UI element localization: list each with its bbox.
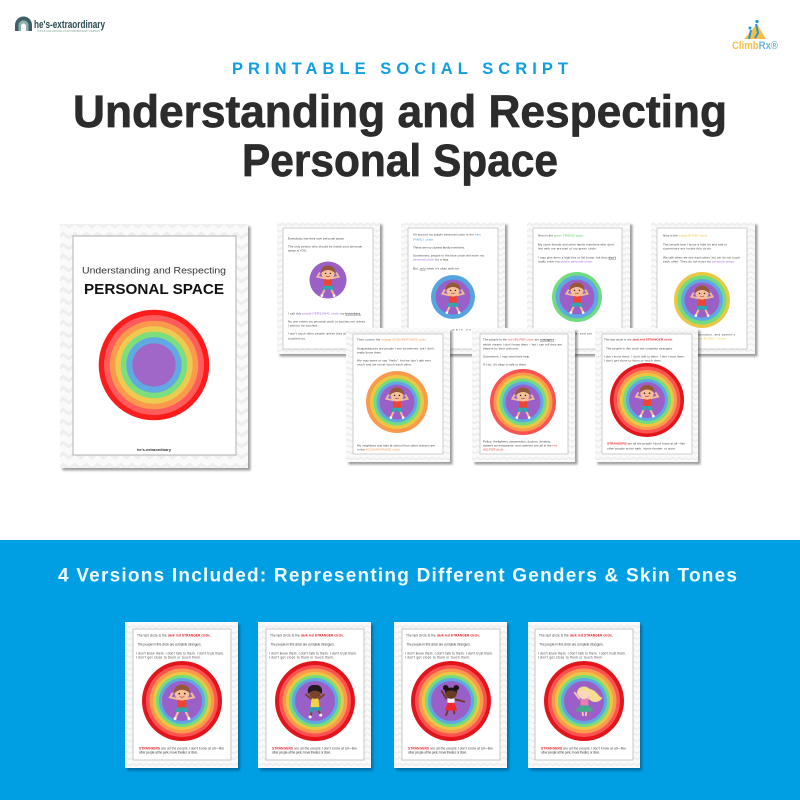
panel: page 2 blue family circle: personal circle for a hug. xyxy=(413,257,449,261)
panel: page 6 red helper circle: waiters at restaurants, and cashiers are all in the red xyxy=(483,443,557,447)
panel: version 4 blonde girl: STRANGERS are all the people I don't know at all—like xyxy=(541,746,626,750)
panel: page 4 yellow buddy circle: friends are in the yellow BUDDY circle. xyxy=(663,336,727,340)
panel: page 4 yellow buddy circle: sometimes are inside this circle. xyxy=(663,246,712,250)
panel: version 1 boy: The people in this circle are complete strangers. xyxy=(138,642,202,646)
panel: page 1 purple personal circle: I want to be touched. xyxy=(288,323,318,327)
panel: version 1 boy xyxy=(125,622,238,768)
panel: version 3 dark-skinned girl: other people at the park, movie theater, or store. xyxy=(408,750,467,754)
panel: page 6 red helper circle: which means I don't know them – but I can tell they are xyxy=(483,342,562,346)
panel: page 6 red helper circle: helpers by their uniforms. xyxy=(483,346,519,350)
panel: page 6 red helper circle: If I do, it's okay to talk to them. xyxy=(483,362,527,366)
panel: page 1 purple personal circle: I don't touch other people unless they also want to be xyxy=(288,331,365,335)
logo: ClimbRx xyxy=(732,20,778,52)
panel: page 2 blue family circle: These are my closest family members. xyxy=(413,245,465,249)
panel: page 2 blue family circle: , hugs, and pats on xyxy=(420,327,471,331)
panel: page 2 blue family circle xyxy=(401,222,505,354)
panel: page 5 orange acquaintance circle: really know them. xyxy=(357,350,382,354)
title xyxy=(73,86,727,186)
panel: page 3 green friend circle: My close friends and other family members who don't xyxy=(538,242,614,246)
panel: page 2 blue family circle: But, only when it's okay with me. xyxy=(413,266,460,270)
panel: version 4 blonde girl: I don't get close to them or touch them. xyxy=(538,655,603,659)
panel: version 3 dark-skinned girl: STRANGERS are all the people I don't know at all—like xyxy=(408,746,493,750)
panel: page 5 orange acquaintance circle: We may wave or say "Hello", but we don't talk very xyxy=(357,358,431,362)
panel: version 3 dark-skinned girl xyxy=(394,622,507,768)
panel: page 4 yellow buddy circle xyxy=(651,222,755,354)
panel: version 2 dark-skinned boy: I don't get close to them or touch them. xyxy=(269,655,334,659)
rainbow circle xyxy=(99,310,209,420)
panel: page 1 purple personal circle: space is YOU. xyxy=(288,248,307,252)
panel: page 1 purple personal circle xyxy=(277,222,380,354)
panel: version 2 dark-skinned boy: STRANGERS are all the people I don't know at all—like xyxy=(272,746,357,750)
panel: page 6 red helper circle xyxy=(472,328,575,462)
panel: page 5 orange acquaintance circle xyxy=(346,328,450,462)
panel: page 4 yellow buddy circle: Next is the yellow BUDDY circle. xyxy=(663,233,708,237)
panel: page 6 red helper circle: Sometimes, I may need their help. xyxy=(483,354,530,358)
panel: page 5 orange acquaintance circle: Then comes the orange ACQUAINTANCE circle. xyxy=(357,337,427,341)
panel: page 6 red helper circle: HELPER circle. xyxy=(483,447,504,451)
panel: cover page: PERSONAL SPACE xyxy=(84,281,224,298)
panel: page 6 red helper circle: Police, firefighters, paramedics, doctors, dentists, xyxy=(483,439,551,443)
panel: page 1 purple personal circle: The only person who should be inside your personal xyxy=(288,244,362,248)
panel: version 3 dark-skinned girl: The people in this circle are complete strangers. xyxy=(406,642,471,646)
icon: boy xyxy=(170,685,194,720)
band heading: 4 Versions Included: Representing Different Genders & Skin Tones xyxy=(58,566,737,586)
panel: version 2 dark-skinned boy: The last circle is the dark red STRANGER circle. xyxy=(270,633,344,637)
panel: version 1 boy: I don't know them. I don't talk to them. I don't trust them. xyxy=(136,651,224,655)
panel: page 7 dark red stranger circle: The people in this circle are complete strangers. xyxy=(606,346,673,350)
panel: page 2 blue family circle: Sometimes, people in the blue circle will enter my xyxy=(413,253,484,257)
panel: version 4 blonde girl: I don't know them. I don't talk to them. I don't trust them. xyxy=(538,651,626,655)
panel: version 2 dark-skinned boy: other people at the park, movie theater, or store. xyxy=(272,750,331,754)
panel: version 1 boy: I don't get close to them or touch them. xyxy=(136,655,201,659)
icon: blonde girl in pink top xyxy=(574,686,602,716)
panel: page 4 yellow buddy circle: The people that I know a little bit and talk to xyxy=(663,242,727,246)
panel: version 3 dark-skinned girl: I don't get close to them or touch them. xyxy=(405,655,470,659)
panel: page 3 green friend circle: live with me are part of my green circle. xyxy=(538,246,597,250)
panel: version 3 dark-skinned girl: The last circle is the dark red STRANGER circle. xyxy=(406,633,480,637)
panel: version 4 blonde girl: other people at the park, movie theater, or store. xyxy=(541,750,600,754)
logo: he's-extraordinary: TOOLS FOR RAISING AN EXTRAORDINARY PERSON xyxy=(37,29,100,33)
panel: page 1 purple personal circle: touched too. xyxy=(288,336,306,340)
panel: version 1 boy: other people at the park, movie theater, or store. xyxy=(139,750,198,754)
panel: page 7 dark red stranger circle: STRANGERS are all the people I don't know at all—like xyxy=(607,441,685,445)
panel: version 4 blonde girl: The people in this circle are complete strangers. xyxy=(540,642,604,646)
panel: version 1 boy: STRANGERS are all the people I don't know at all—like xyxy=(139,746,224,750)
panel: cover page: he's-extraordinary xyxy=(137,448,171,452)
panel: cover page: Understanding and Respecting xyxy=(82,266,226,276)
panel: version 2 dark-skinned boy: The people in this circle are complete strangers. xyxy=(270,642,335,646)
panel: page 3 green friend circle: Next is the green FRIEND circle. xyxy=(538,233,584,237)
panel: page 7 dark red stranger circle xyxy=(595,328,698,462)
panel: page 1 purple personal circle: I call this purple PERSONAL circle my boundary. xyxy=(288,311,361,315)
icon: dark-skinned boy in yellow shirt xyxy=(305,685,325,718)
panel: cover page xyxy=(60,224,248,468)
panel: page 2 blue family circle: FAMILY circle. xyxy=(413,237,434,241)
panel: page 4 yellow buddy circle: Kids on my team, classmates, and parent's xyxy=(663,332,735,336)
panel: version 3 dark-skinned girl: I don't know them. I don't talk to them. I don't trust them. xyxy=(405,651,493,655)
panel: page 7 dark red stranger circle: other people at the park, movie theater, or store. xyxy=(607,446,676,450)
panel: page 5 orange acquaintance circle: My neighbors and kids at school from other classes are xyxy=(357,443,435,447)
panel: page 4 yellow buddy circle: each other. They do not enter my personal space. xyxy=(663,259,735,263)
panel: version 2 dark-skinned boy xyxy=(258,622,371,768)
title: Understanding and Respecting xyxy=(73,86,727,137)
logo: he's-extraordinary xyxy=(15,16,106,33)
panel: page 1 purple personal circle: Everybody has their own personal space. xyxy=(288,236,345,240)
panel: page 5 orange acquaintance circle: Acquaintances are people I see sometimes, but I don't xyxy=(357,346,434,350)
panel: version 1 boy: The last circle is the dark red STRANGER circle. xyxy=(137,633,211,637)
panel: page 3 green friend circle: really enter my purple personal circle. xyxy=(538,259,593,263)
panel: page 3 green friend circle xyxy=(527,222,630,354)
panel: page 5 orange acquaintance circle: in the ACQUAINTANCE circle. xyxy=(357,447,401,451)
panel: page 7 dark red stranger circle: The last circle is the dark red STRANGER circle. xyxy=(604,337,673,341)
panel: version 4 blonde girl xyxy=(528,622,640,768)
panel: page 2 blue family circle: All around my purple personal circle is the blue xyxy=(413,232,481,236)
panel: version 4 blonde girl: The last circle is the dark red STRANGER circle. xyxy=(539,633,613,637)
panel: page 4 yellow buddy circle: We talk when we see each other, but we do not touch xyxy=(663,255,740,259)
panel: page 3 green friend circle: classmates, parents, and our xyxy=(545,331,592,335)
eyebrow heading: PRINTABLE SOCIAL SCRIPT xyxy=(232,60,568,78)
panel: page 1 purple personal circle: No one enters my personal circle or touches me unless xyxy=(288,319,365,323)
panel: page 5 orange acquaintance circle: much and we never touch each other. xyxy=(357,362,412,366)
title: Personal Space xyxy=(242,135,558,186)
panel: page 6 red helper circle: The people in the red HELPER circle are strangers - xyxy=(483,337,556,341)
logo: ClimbRx: ClimbRx® xyxy=(732,40,778,52)
panel: page 3 green friend circle: I may give them a high five or fist bump, but they don't xyxy=(538,255,616,259)
panel: page 7 dark red stranger circle: I don't know them. I don't talk to them. I don't trust them. xyxy=(604,354,685,358)
panel: version 2 dark-skinned boy: I don't know them. I don't talk to them. I don't trust them. xyxy=(269,651,357,655)
panel: page 7 dark red stranger circle: I don't get close to them or touch them. xyxy=(604,358,662,362)
blue band xyxy=(0,540,800,800)
icon: dark-skinned girl in red overalls xyxy=(441,685,465,716)
logo: he's-extraordinary: he's-extraordinary xyxy=(34,19,106,31)
